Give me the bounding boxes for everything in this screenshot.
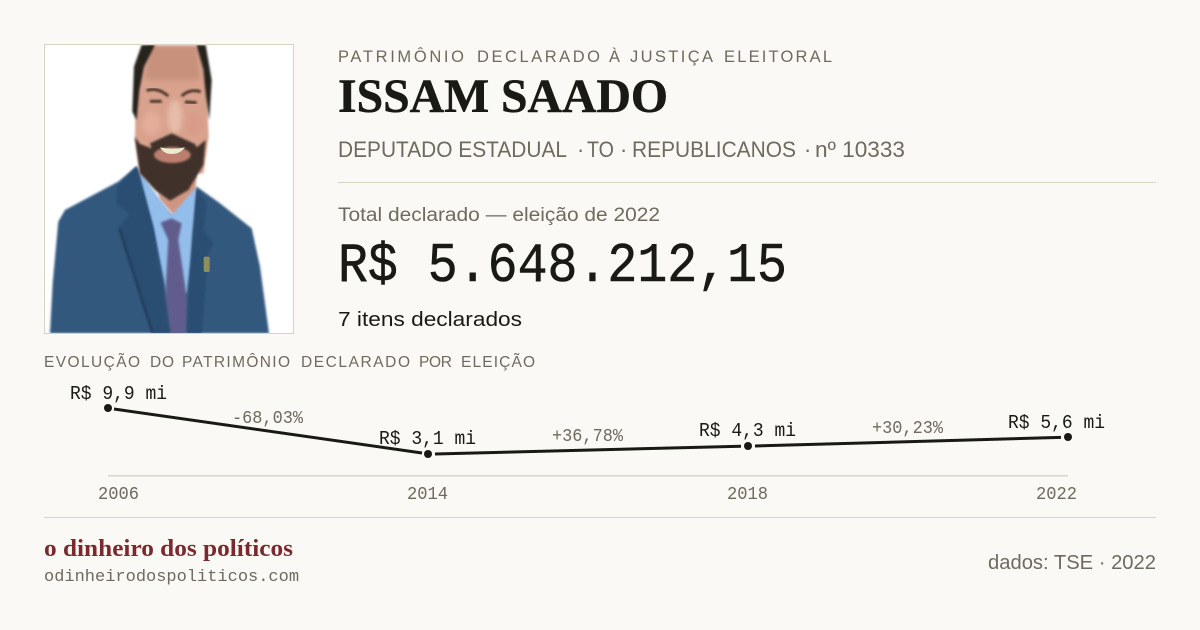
icon: smile — [160, 147, 185, 154]
year labels — [98, 485, 1077, 505]
icon: beard — [135, 133, 206, 201]
value labels: R$ 3,1 mi — [379, 428, 476, 450]
icon: face — [135, 46, 209, 173]
chart heading: POR — [419, 354, 452, 371]
subtitle: office, state, party, number: DEPUTADO ESTADUAL — [338, 137, 567, 162]
icon: forehead shading — [145, 46, 200, 80]
chart heading: DO — [150, 354, 174, 371]
title: candidate name: ISSAM SAADO — [338, 70, 668, 123]
icon: neck — [156, 174, 198, 214]
icon: lapel pin — [204, 257, 210, 272]
year labels: 2018 — [727, 485, 768, 505]
footer brand: o dinheiro dos políticos — [44, 536, 293, 562]
eyebrow heading: PATRIMÔNIO — [338, 47, 464, 66]
subtitle: office, state, party, number: REPUBLICANOS — [632, 137, 796, 162]
icon: tie — [161, 218, 187, 333]
chart heading — [44, 354, 535, 371]
footer url: odinheirodospoliticos.com — [44, 568, 299, 587]
year labels: 2006 — [98, 485, 139, 505]
value labels: R$ 4,3 mi — [699, 420, 796, 442]
icon: suit jacket — [50, 166, 269, 333]
subtitle: office, state, party, number: · — [804, 137, 811, 162]
subtitle: office, state, party, number — [338, 137, 905, 162]
value labels: R$ 9,9 mi — [70, 383, 167, 405]
icon: eyebrows and eyes — [147, 89, 201, 103]
percent change labels: +30,23% — [872, 419, 943, 439]
icon: lapels — [116, 167, 213, 333]
line chart: declared assets per election — [70, 383, 1105, 505]
value labels: R$ 5,6 mi — [1008, 412, 1105, 434]
icon: shirt collar — [138, 170, 197, 293]
icon: nose and cheeks — [144, 100, 184, 134]
percent change labels: -68,03% — [232, 409, 303, 429]
chart heading: DECLARADO — [301, 354, 410, 371]
subtitle: office, state, party, number: nº 10333 — [815, 137, 905, 162]
items count: 7 itens declarados — [338, 308, 522, 331]
trend line — [114, 409, 1061, 454]
icon: hair — [132, 45, 212, 120]
icon: lapel edge — [119, 228, 153, 333]
eyebrow heading: DECLARADO — [477, 48, 600, 66]
percent change labels — [232, 409, 943, 447]
value labels — [70, 383, 1105, 450]
chart heading: PATRIMÔNIO — [182, 354, 290, 371]
eyebrow heading — [338, 47, 832, 66]
chart heading: EVOLUÇÃO — [44, 354, 140, 371]
subtitle: office, state, party, number: · — [620, 137, 627, 162]
icon: lower lip — [154, 147, 191, 163]
eyebrow heading: À — [609, 47, 620, 66]
data source: dados: TSE · 2022 — [988, 552, 1156, 574]
subtitle: office, state, party, number: · — [577, 137, 584, 162]
portrait photo — [44, 44, 294, 334]
subtitle: office, state, party, number: TO — [587, 137, 614, 162]
total declared value: R$ 5.648.212,15 — [338, 234, 787, 298]
year labels: 2022 — [1036, 485, 1077, 505]
chart heading: ELEIÇÃO — [461, 354, 535, 371]
data points — [104, 404, 1072, 458]
eyebrow heading: ELEITORAL — [724, 48, 832, 66]
year labels: 2014 — [407, 485, 448, 505]
percent change labels: +36,78% — [552, 427, 623, 447]
eyebrow heading: JUSTIÇA — [630, 48, 713, 66]
total declared label: Total declarado — eleição de 2022 — [338, 205, 660, 226]
